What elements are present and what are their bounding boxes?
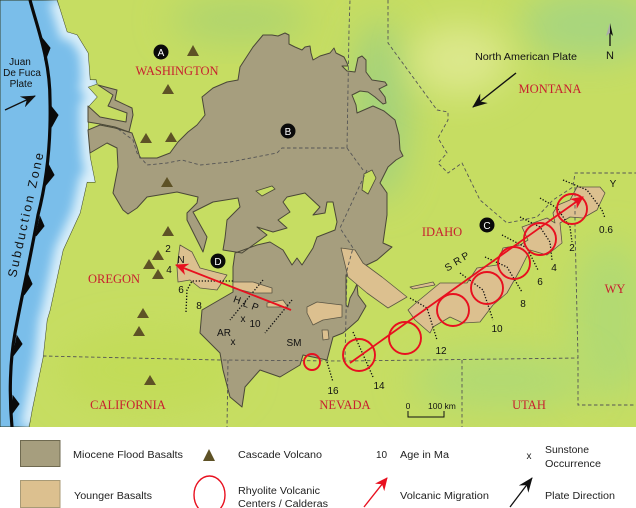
location markers A B C D: B xyxy=(285,127,292,138)
age and site labels: P xyxy=(250,301,260,314)
state names xyxy=(88,64,625,412)
age and site labels: 8 xyxy=(520,299,526,310)
volcanic migration arrows xyxy=(176,197,583,363)
age and site labels: 10 xyxy=(491,324,503,335)
age and site labels: R xyxy=(452,255,464,268)
legend: age in Ma: 10 xyxy=(376,450,388,461)
legend: volcanic migration: Volcanic Migration xyxy=(400,491,489,502)
age and site labels: x xyxy=(230,337,236,348)
North American plate arrow xyxy=(473,73,516,107)
legend: volcanic migration xyxy=(364,478,489,507)
Juan De Fuca plate arrow xyxy=(5,96,35,110)
location markers A B C D: D xyxy=(214,257,222,268)
legend: Miocene flood basalts xyxy=(20,440,183,466)
age and site labels: x xyxy=(240,314,246,325)
age and site labels: 2 xyxy=(165,244,171,255)
location markers A B C D: C xyxy=(483,221,491,232)
age and site labels: 16 xyxy=(327,386,339,397)
state names: NEVADA xyxy=(319,398,371,412)
basalt strip along river xyxy=(88,85,133,132)
subduction zone label: Subduction Zone xyxy=(5,152,46,279)
Juan De Fuca plate label xyxy=(4,58,41,87)
legend: Miocene flood basalts: Miocene Flood Basalts xyxy=(73,450,183,461)
age and site labels: P xyxy=(460,250,472,263)
Miocene flood basalts xyxy=(88,33,403,407)
basalt islands xyxy=(256,170,376,196)
age and site labels: 6 xyxy=(178,285,184,296)
age and site labels xyxy=(165,179,617,397)
age and site labels: 12 xyxy=(435,346,447,357)
state names: MONTANA xyxy=(519,82,581,96)
age and site labels: 4 xyxy=(166,265,172,276)
state names: CALIFORNIA xyxy=(90,398,166,412)
age and site labels: 6 xyxy=(537,277,543,288)
legend: plate direction: Plate Direction xyxy=(545,491,615,502)
location markers A B C D xyxy=(154,44,494,268)
north arrow xyxy=(606,23,614,59)
age and site labels: S xyxy=(443,261,455,274)
age and site labels: 4 xyxy=(551,263,557,274)
legend: younger basalts xyxy=(20,480,152,508)
scale bar: 0 xyxy=(406,401,411,411)
legend: rhyolite centers: Rhyolite Volcanic xyxy=(238,486,320,497)
age and site labels: 10 xyxy=(249,319,261,330)
Juan De Fuca plate label: Plate xyxy=(10,79,33,90)
north arrow: N xyxy=(606,50,614,62)
location markers A B C D: A xyxy=(158,48,165,59)
state borders xyxy=(43,0,636,427)
legend: plate direction xyxy=(510,478,615,507)
legend: sunstone occurrence xyxy=(526,445,601,470)
cascade volcanoes xyxy=(133,45,199,385)
North American plate label: North American Plate xyxy=(475,52,577,63)
legend: sunstone occurrence: Occurrence xyxy=(545,459,601,470)
state names: IDAHO xyxy=(422,225,462,239)
age and site labels: H xyxy=(232,294,242,307)
rhyolite caldera circles xyxy=(304,194,587,371)
legend: sunstone occurrence: x xyxy=(526,451,532,462)
state names: WASHINGTON xyxy=(135,64,219,78)
younger basalt patches xyxy=(177,187,605,340)
age and site labels: SM xyxy=(286,338,302,349)
scale bar xyxy=(406,403,456,418)
Juan De Fuca plate label: De Fuca xyxy=(3,68,41,79)
legend: age in Ma: Age in Ma xyxy=(400,450,449,461)
legend: younger basalts: Younger Basalts xyxy=(74,491,152,502)
state names: WY xyxy=(605,282,625,296)
legend: sunstone occurrence: Sunstone xyxy=(545,445,589,456)
legend: rhyolite centers xyxy=(194,476,328,508)
age and site labels: N xyxy=(177,255,185,266)
age and site labels: L xyxy=(241,299,251,311)
ocean xyxy=(0,0,97,427)
state names: OREGON xyxy=(88,272,140,286)
Juan De Fuca plate label: Juan xyxy=(9,57,31,68)
legend: cascade volcano: Cascade Volcano xyxy=(238,450,322,461)
legend xyxy=(20,440,615,508)
state names: UTAH xyxy=(512,398,546,412)
scale bar: 100 km xyxy=(428,401,456,411)
legend: age in Ma xyxy=(376,450,449,461)
age and site labels: 8 xyxy=(196,301,202,312)
subduction zone trench xyxy=(10,0,58,427)
age and site labels: AR xyxy=(217,328,231,339)
age and site labels: Y xyxy=(610,179,617,190)
age and site labels: 2 xyxy=(569,243,575,254)
age isochrons xyxy=(186,180,605,382)
age and site labels: 14 xyxy=(373,381,385,392)
legend: cascade volcano xyxy=(203,449,322,461)
age and site labels: 0.6 xyxy=(599,225,613,236)
